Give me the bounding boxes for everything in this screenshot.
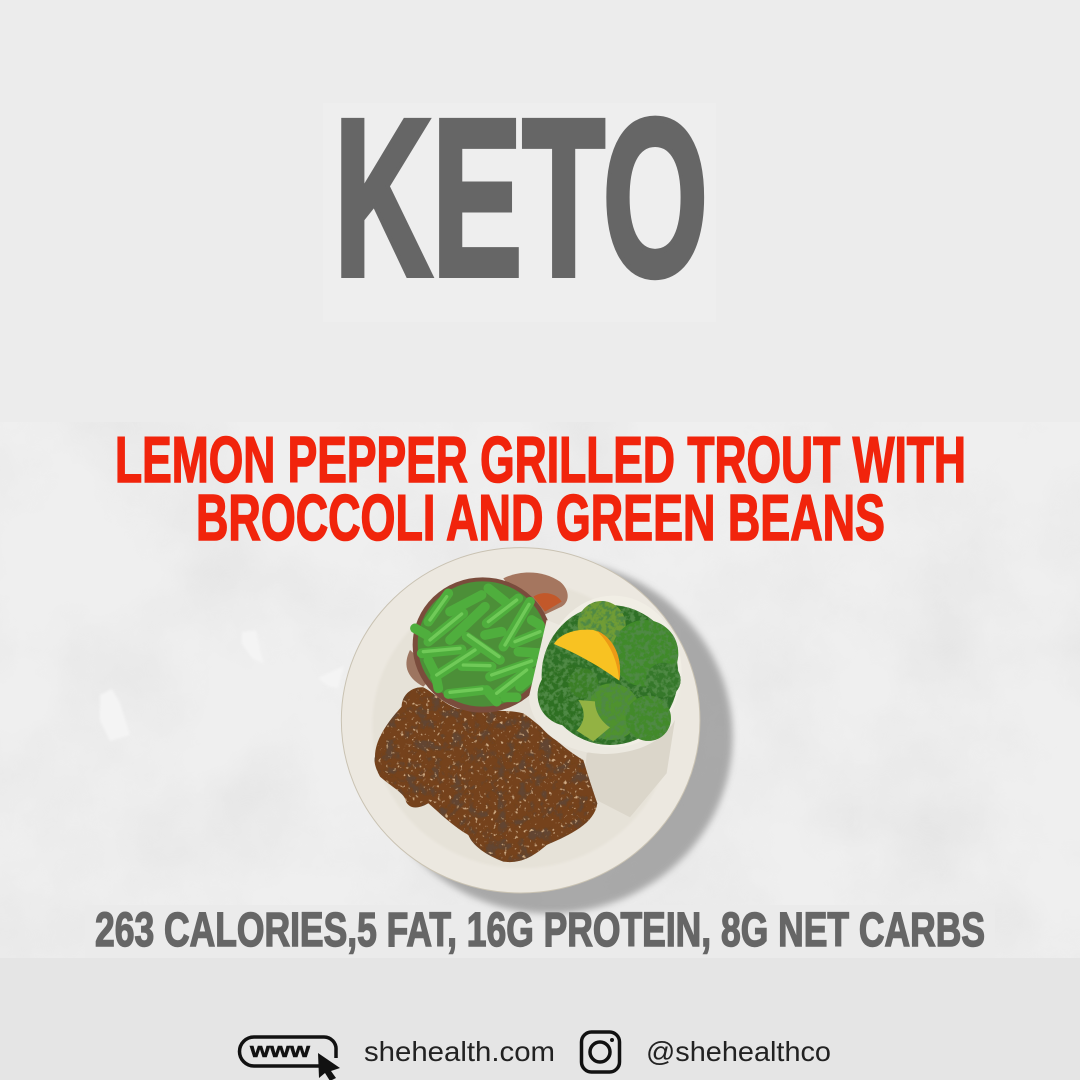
- green beans bowl: [413, 577, 553, 713]
- website text: shehealth.com: [364, 1036, 555, 1067]
- food photo: plate: [341, 548, 733, 913]
- handle text: @shehealthco: [646, 1036, 831, 1067]
- broccoli stem: [577, 700, 610, 741]
- icon: instagram: [582, 1032, 620, 1072]
- plate shadow: [367, 560, 733, 913]
- bowl shadow on plate: [583, 720, 675, 817]
- footer: instagram: [582, 1032, 831, 1072]
- sweet potato: [406, 572, 568, 687]
- icon: www cursor: www: [249, 1040, 311, 1062]
- title: KETO: KETO: [334, 73, 708, 323]
- icon: www cursor: [239, 1037, 340, 1080]
- lemon wedge: [554, 630, 620, 681]
- grilled trout: [375, 687, 597, 862]
- footer: website: [239, 1036, 555, 1080]
- broccoli bowl: [529, 596, 683, 754]
- heading: dish name: [115, 423, 966, 554]
- plate: [341, 548, 700, 893]
